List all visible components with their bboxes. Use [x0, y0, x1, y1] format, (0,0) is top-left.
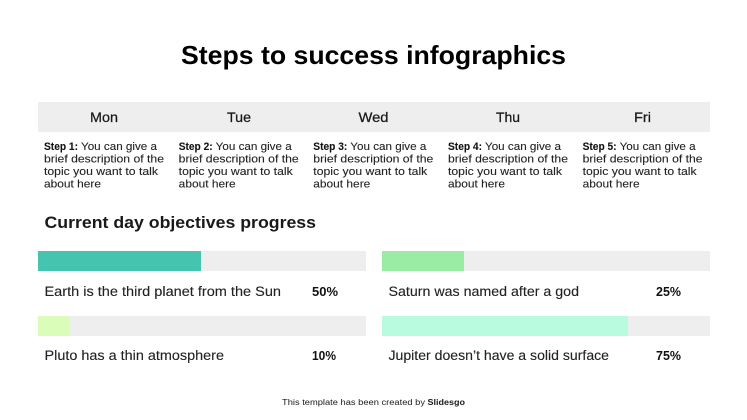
step 3 text: about here — [313, 178, 370, 190]
step 1 text: topic you want to talk — [44, 166, 159, 178]
progress item: Earth 50%: Earth is the third planet from the Sun — [44, 284, 281, 299]
step 1 text: Step 1: — [44, 141, 78, 153]
progress item: Pluto 10%: Pluto has a thin atmosphere — [44, 348, 224, 363]
day labels — [90, 110, 651, 125]
step 4 text — [448, 141, 568, 190]
step 5 text: You can give a — [620, 141, 697, 153]
step 3 text: You can give a — [350, 141, 427, 153]
step 3 text: brief description of the — [313, 154, 433, 166]
step 5 text: about here — [583, 178, 640, 190]
footer credit: Slidesgo — [428, 398, 465, 407]
progress item: Saturn 25%: 25% — [656, 285, 681, 299]
progress item: Pluto 10% — [38, 316, 366, 363]
step 5 text — [583, 141, 703, 190]
step 2 text — [179, 141, 299, 190]
step 2 text: brief description of the — [179, 154, 299, 166]
footer credit: This template has been created by — [282, 398, 425, 407]
step 5 text: brief description of the — [583, 154, 703, 166]
step 1 text — [44, 141, 164, 190]
step 2 text: Step 2: — [179, 141, 213, 153]
progress item: Earth 50% — [38, 251, 366, 299]
day labels: Tue — [227, 110, 251, 125]
header band — [38, 102, 710, 132]
step 1 text: about here — [44, 178, 101, 190]
progress item: Saturn 25% — [382, 251, 710, 299]
step 5 text: topic you want to talk — [583, 166, 697, 178]
section heading: Current day objectives progress — [44, 213, 316, 232]
day labels: Mon — [90, 110, 118, 125]
day labels: Fri — [634, 110, 651, 125]
panel: weekly schedule — [38, 102, 710, 190]
step 5 text: Step 5: — [583, 141, 617, 153]
day labels: Wed — [358, 110, 388, 125]
step 3 text: Step 3: — [313, 141, 347, 153]
step 3 text — [313, 141, 433, 190]
progress item: Earth 50%: 50% — [312, 285, 338, 299]
step 2 text: You can give a — [216, 141, 293, 153]
progress item: Pluto 10%: 10% — [312, 349, 336, 363]
step 4 text: about here — [448, 178, 505, 190]
progress item: Jupiter 75% — [382, 316, 710, 363]
step 2 text: topic you want to talk — [179, 166, 293, 178]
progress item: Saturn 25%: Saturn was named after a god — [388, 284, 579, 299]
step 4 text: brief description of the — [448, 154, 568, 166]
footer credit — [282, 398, 465, 407]
step 1 text: You can give a — [81, 141, 158, 153]
title: Steps to success infographics — [181, 40, 566, 70]
step 4 text: Step 4: — [448, 141, 482, 153]
step 2 text: about here — [179, 178, 236, 190]
step 1 text: brief description of the — [44, 154, 164, 166]
progress item: Jupiter 75%: Jupiter doesn’t have a solid surface — [388, 348, 609, 363]
step 4 text: topic you want to talk — [448, 166, 563, 178]
step 3 text: topic you want to talk — [313, 166, 428, 178]
step 4 text: You can give a — [485, 141, 562, 153]
progress item: Jupiter 75%: 75% — [656, 349, 681, 363]
day labels: Thu — [496, 110, 520, 125]
